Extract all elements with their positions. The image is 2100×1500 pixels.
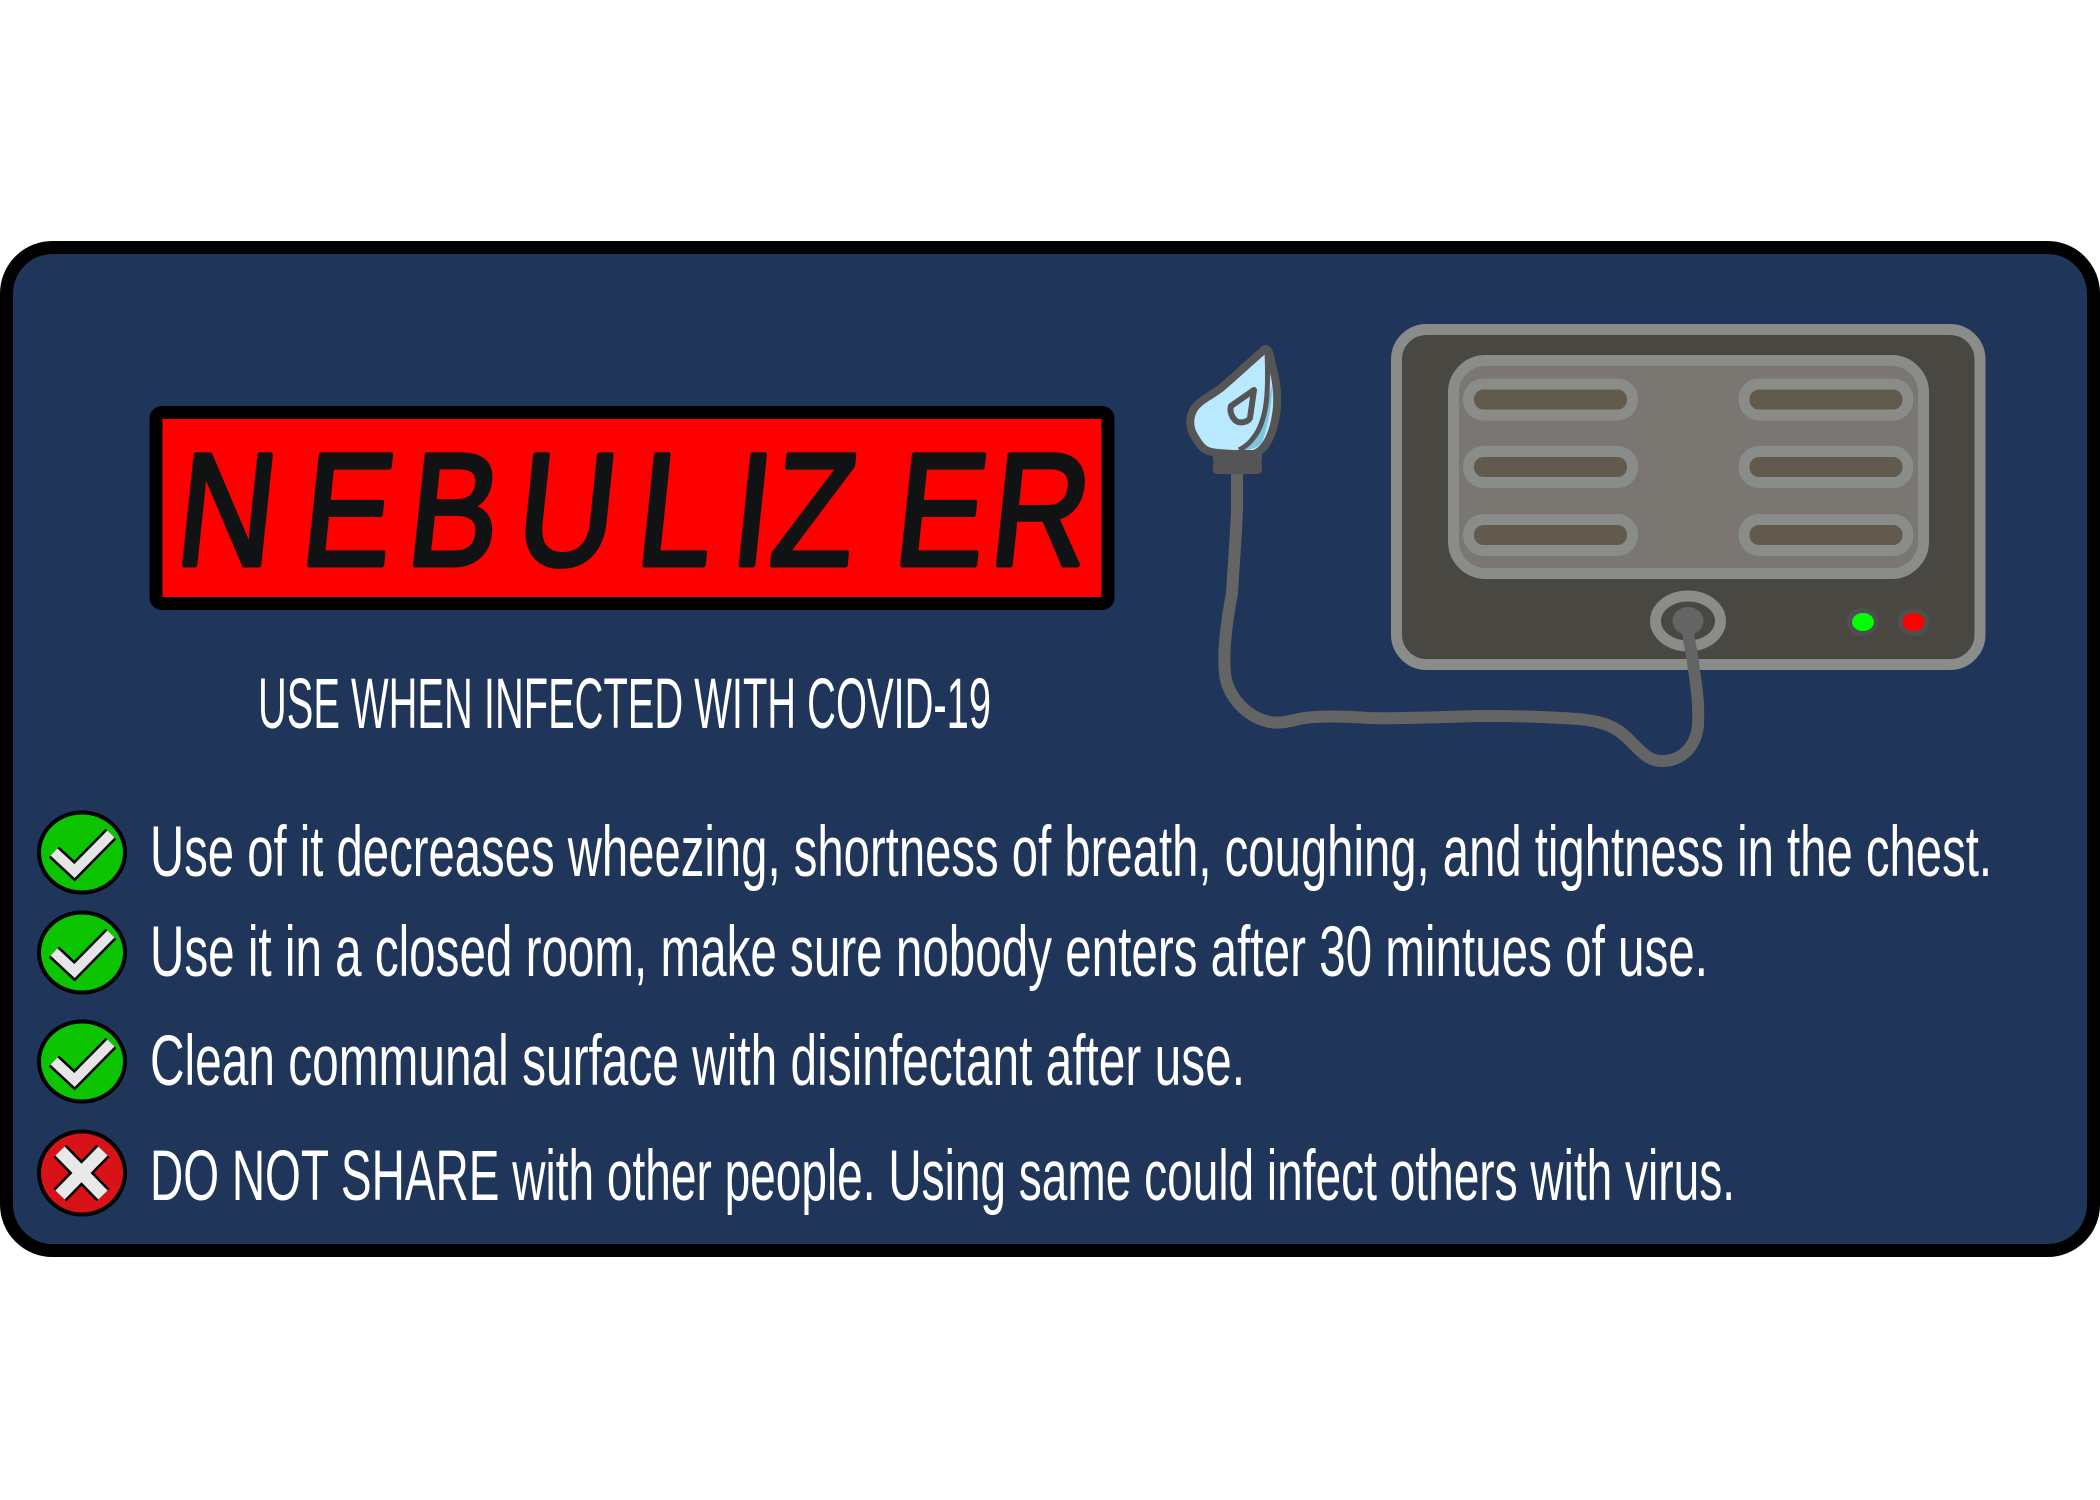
row 2: check icon [39,912,125,992]
cable port [1656,596,1720,646]
illustration: cable [1224,470,1698,761]
row 4: cross icon [39,1132,125,1214]
machine body [1396,330,1980,664]
panel: navy background card [6,248,2094,1250]
illustration: mask [1190,349,1277,474]
vent panel [1454,360,1924,574]
mask valve [1230,390,1254,422]
row 3: check icon [39,1022,125,1102]
title banner [156,412,1108,604]
row 1: check icon [39,812,125,892]
subtitle: USE WHEN INFECTED WITH COVID-19 [258,665,991,744]
illustration: nebulizer machine [1396,330,1980,664]
row 3: text: Clean communal surface with disinfectant after use. [150,1022,1245,1101]
mask connector [1213,452,1262,474]
title text: NEBULIZER [169,421,1099,600]
indicator lights [1847,608,1930,636]
